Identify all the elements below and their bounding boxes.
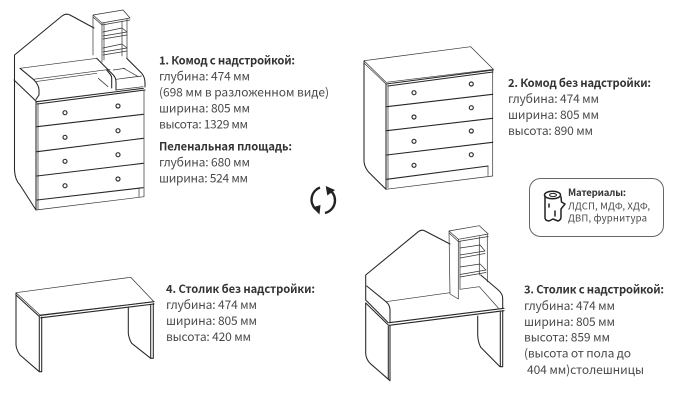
materials text: Материалы: (568, 185, 626, 199)
text: item 2 dimensions (508, 75, 651, 139)
right leg (128, 304, 153, 358)
text: item 3 dimensions: 3. Столик с надстройкой: (524, 281, 664, 297)
dresser body (14, 80, 145, 210)
text: item 1 dimensions: глубина: 680 мм (159, 154, 250, 171)
text: item 3 dimensions: (высота от пола до (524, 345, 631, 362)
text: item 4 dimensions: ширина: 805 мм (166, 312, 257, 329)
illustration: chest of drawers without hutch (364, 47, 493, 189)
dresser top (364, 47, 493, 82)
desk top (16, 277, 154, 315)
text: item 4 dimensions: глубина: 474 мм (166, 296, 257, 313)
house-shaped back panel (14, 14, 94, 80)
dresser body (364, 61, 493, 189)
callout frame (530, 178, 664, 236)
callout: materials (530, 178, 664, 236)
materials text: ДВП, фурнитура (568, 211, 647, 225)
text: item 1 dimensions: ширина: 524 мм (159, 170, 248, 187)
text: item 3 dimensions: глубина: 474 мм (524, 297, 615, 314)
illustration: desk without hutch (16, 277, 154, 372)
text: item 2 dimensions: ширина: 805 мм (508, 106, 599, 123)
illustration: chest of drawers with hutch (14, 10, 145, 210)
materials text: ЛДСП, МДФ, ХДФ, (568, 198, 650, 212)
drawers (37, 114, 143, 200)
changing table top (14, 58, 145, 102)
text: item 2 dimensions: высота: 890 мм (508, 122, 593, 139)
text: item 4 dimensions (166, 281, 315, 345)
side rims (366, 275, 503, 325)
text: item 4 dimensions: высота: 420 мм (166, 328, 251, 345)
desk surface (386, 287, 504, 325)
desk top front edge (40, 302, 154, 318)
icon: wooden log (544, 191, 565, 221)
drawer handles (63, 104, 120, 188)
materials text (568, 185, 650, 225)
text: item 2 dimensions: 2. Комод без надстройки: (508, 75, 651, 91)
drawers (387, 94, 493, 179)
text: item 1 dimensions: глубина: 474 мм (159, 68, 250, 85)
text: item 1 dimensions: высота: 1329 мм (159, 116, 248, 133)
house-shaped back panel (366, 230, 450, 300)
left leg (366, 303, 390, 381)
text: item 3 dimensions: высота: 859 мм (524, 329, 610, 346)
drawer handles (412, 82, 473, 167)
text: item 1 dimensions: 1. Комод с надстройкой: (159, 53, 295, 69)
text: item 4 dimensions: 4. Столик без надстройки: (166, 281, 315, 297)
text: item 3 dimensions (524, 281, 664, 378)
left leg (16, 293, 42, 372)
hutch shelves (449, 226, 488, 299)
right leg (478, 311, 503, 367)
text: item 3 dimensions: 404 мм)столешницы (527, 361, 644, 378)
text: item 3 dimensions: ширина: 805 мм (524, 313, 615, 330)
text: item 1 dimensions: (698 мм в разложенном виде) (159, 84, 329, 101)
text: item 2 dimensions: глубина: 474 мм (508, 90, 599, 107)
text: item 1 dimensions: ширина: 805 мм (159, 100, 250, 117)
text: item 1 dimensions (159, 53, 329, 187)
icon: rotate arrows (312, 186, 335, 214)
illustration: desk with hutch (366, 226, 504, 381)
text: item 1 dimensions: Пеленальная площадь: (159, 139, 292, 155)
hutch shelves (93, 10, 130, 62)
